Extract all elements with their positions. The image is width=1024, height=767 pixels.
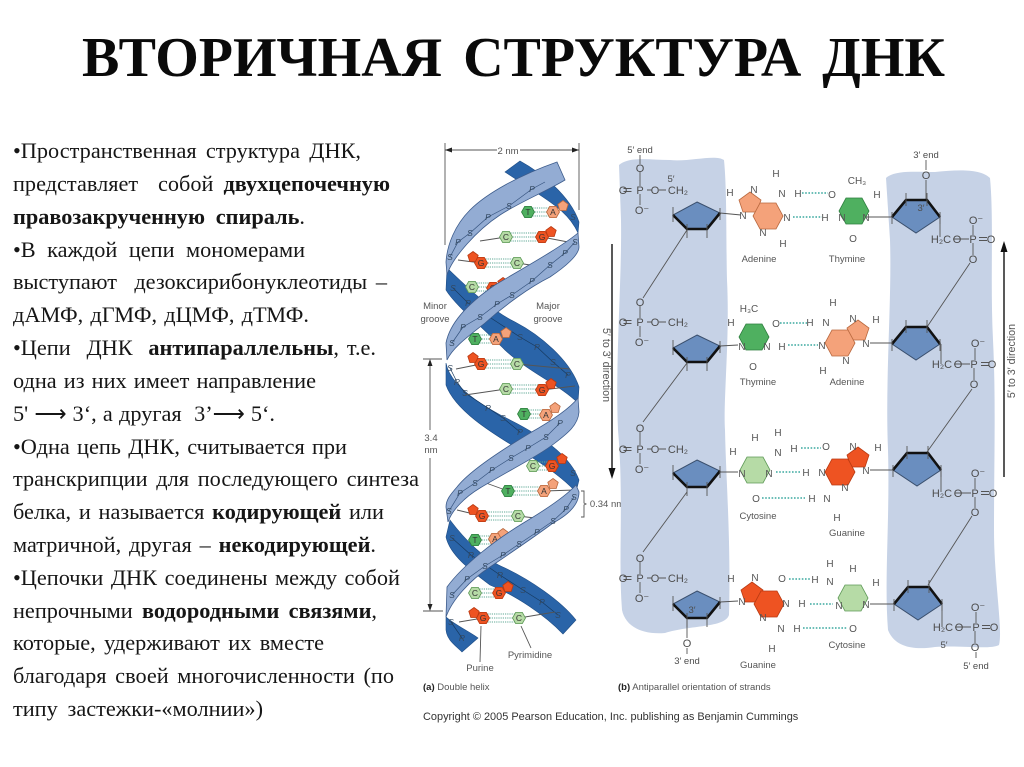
chemical labels: bases: H xyxy=(873,190,881,201)
chemical labels: bases: H xyxy=(798,599,806,610)
dimension: 2 nm xyxy=(445,143,579,245)
base pairs: T xyxy=(525,207,531,217)
dark strand sugar-phosphate labels: S xyxy=(555,610,561,620)
light strand sugar-phosphate labels: P xyxy=(557,418,563,428)
text block: DNA secondary structure description: одна из них имеет направление xyxy=(13,368,316,393)
chemical labels: backbone: 3′ xyxy=(917,203,925,214)
base pairs: A xyxy=(541,486,547,496)
base pairs: G xyxy=(539,385,545,395)
chemical labels: backbone: CH₂ xyxy=(668,317,688,329)
chemical labels: bases: N xyxy=(759,613,767,624)
light strand sugar-phosphate labels: P xyxy=(457,488,463,498)
light strand sugar-phosphate labels: S xyxy=(571,492,577,502)
dimension: 0.34 nm xyxy=(581,491,624,517)
chemical labels: backbone: O xyxy=(619,444,628,456)
base pairs: A xyxy=(492,534,498,544)
chemical labels: backbone: O xyxy=(636,553,645,565)
light strand sugar-phosphate labels: P xyxy=(529,184,535,194)
chemical labels: bases: N xyxy=(826,577,834,588)
labels: purine and pyrimidine: Pyrimidine xyxy=(508,650,552,661)
dark strand sugar-phosphate labels: P xyxy=(465,298,471,308)
light strand sugar-phosphate labels: P xyxy=(489,465,495,475)
labels: purine and pyrimidine xyxy=(466,626,552,674)
base names: Thymine xyxy=(829,254,865,265)
text block: DNA secondary structure description: •Цепочки ДНК соединены между собой xyxy=(13,565,400,590)
light strand sugar-phosphate labels: P xyxy=(534,527,540,537)
chemical labels: backbone: CH₂ xyxy=(668,185,688,197)
chemical labels: bases: O xyxy=(772,319,780,330)
chemical labels: backbone: O xyxy=(683,638,692,650)
base names: Guanine xyxy=(740,660,776,671)
dark strand sugar-phosphate labels xyxy=(447,212,576,643)
dark strand sugar-phosphate labels: S xyxy=(448,617,454,627)
chemical labels: backbone: O xyxy=(955,622,964,634)
chemical labels: bases: N xyxy=(822,318,830,329)
chemical labels: bases: N xyxy=(841,483,849,494)
light strand sugar-phosphate labels: S xyxy=(543,432,549,442)
chemical labels: backbone: P xyxy=(970,359,978,371)
text block: DNA secondary structure description: благодаря своей многочисленности (по xyxy=(13,663,394,688)
chemical labels: backbone: O xyxy=(989,488,998,500)
base pairs: A xyxy=(550,207,556,217)
nitrogen bases xyxy=(739,192,869,617)
base pairs: T xyxy=(472,535,478,545)
chemical labels: bases: H xyxy=(802,468,810,479)
chemical labels: bases: H xyxy=(727,318,735,329)
chemical labels: bases: H xyxy=(829,298,837,309)
light strand sugar-phosphate labels: S xyxy=(508,453,514,463)
copyright: Copyright © 2005 Pearson Education, Inc. publishing as Benjamin Cummings xyxy=(423,711,799,723)
caption: double helix: (a) Double helix xyxy=(423,682,490,693)
chemical labels: backbone: O xyxy=(651,185,660,197)
light strand sugar-phosphate labels: P xyxy=(563,504,569,514)
groove labels: groove xyxy=(420,314,450,325)
chemical labels: bases: N xyxy=(823,494,831,505)
dimension: 3.4 nm: nm xyxy=(424,445,438,456)
chemical labels: backbone: O⁻ xyxy=(635,337,649,349)
chemical labels: bases: N xyxy=(739,211,747,222)
base pairs: T xyxy=(521,409,527,419)
chemical labels: bases: H xyxy=(874,443,882,454)
chemical labels: bases: N xyxy=(835,601,843,612)
chemical labels: bases: H xyxy=(808,494,816,505)
chemical labels: backbone: O xyxy=(651,573,660,585)
text block: DNA secondary structure description: транскрипции для последующего синтеза xyxy=(13,466,419,491)
dark strand sugar-phosphate labels: R xyxy=(459,633,465,643)
chemical labels: backbone: O xyxy=(651,444,660,456)
chemical labels: bases: H xyxy=(833,513,841,524)
dark strand sugar-phosphate labels: R xyxy=(468,550,474,560)
chemical labels: bases: N xyxy=(849,314,857,325)
text block: DNA secondary structure description: 5' ⟶ 3‘, а другая 3’⟶ 5‘. xyxy=(13,401,275,426)
base pairs: G xyxy=(549,461,555,471)
chemical labels: backbone: O xyxy=(969,254,978,266)
chemical labels: bases: O xyxy=(778,574,786,585)
light strand sugar-phosphate labels: S xyxy=(506,201,512,211)
light strand sugar-phosphate labels: P xyxy=(525,443,531,453)
chemical labels: bases: CH₃ xyxy=(848,176,866,187)
chemical labels: bases: O xyxy=(849,624,857,635)
base pairs: G xyxy=(539,232,545,242)
base names: Cytosine xyxy=(829,640,865,651)
chemical labels: backbone: 5′ xyxy=(667,174,675,185)
base pairs: C xyxy=(514,359,520,369)
chemical labels: backbone: O⁻ xyxy=(635,593,649,605)
base pairs: T xyxy=(472,334,478,344)
text block: DNA secondary structure description: типу застежки-«молнии») xyxy=(13,696,263,721)
base pairs: G xyxy=(478,258,484,268)
chemical labels: bases: H xyxy=(772,169,780,180)
dimension: 0.34 nm: 0.34 nm xyxy=(590,499,624,510)
chemical labels: backbone: H₂C xyxy=(933,622,953,634)
light strand sugar-phosphate labels xyxy=(446,182,578,600)
base pairs: C xyxy=(472,588,478,598)
back dark ribbons xyxy=(446,161,579,652)
base names: Guanine xyxy=(829,528,865,539)
dark strand sugar-phosphate labels: S xyxy=(570,468,576,478)
chemical labels: bases: H xyxy=(849,564,857,575)
chemical labels: bases: H xyxy=(793,624,801,635)
chemical labels: bases: N xyxy=(838,213,846,224)
chemical labels: bases: N xyxy=(862,339,870,350)
chemical labels: backbone: 5′ xyxy=(940,640,948,651)
chemical labels: backbone: P xyxy=(636,573,644,585)
light strand sugar-phosphate labels: P xyxy=(464,574,470,584)
light strand sugar-phosphate labels: S xyxy=(446,506,452,516)
base pairs: C xyxy=(503,384,509,394)
light strand sugar-phosphate labels: P xyxy=(494,299,500,309)
light strand sugar-phosphate labels: S xyxy=(447,252,453,262)
chemical labels: backbone: O⁻ xyxy=(635,205,649,217)
text block: DNA secondary structure description: непрочными водородными связями, xyxy=(13,598,377,623)
chemical labels: bases: H₃C xyxy=(740,304,758,315)
chemical labels: bases: N xyxy=(862,466,870,477)
chemical labels: bases: N xyxy=(862,213,870,224)
dark strand sugar-phosphate labels: P xyxy=(534,342,540,352)
chemical labels: bases: H xyxy=(726,188,734,199)
chemical labels: bases: N xyxy=(763,342,771,353)
text block: DNA secondary structure description: матричной, другая – некодирующей. xyxy=(13,532,376,557)
light strand sugar-phosphate labels: P xyxy=(562,248,568,258)
arrow: left 5' to 3' direction xyxy=(600,244,616,479)
light strand sugar-phosphate labels: S xyxy=(516,539,522,549)
base pair connectors xyxy=(456,208,575,622)
chemical labels: bases: H xyxy=(768,644,776,655)
text block: DNA secondary structure description: представляет собой двухцепочечную xyxy=(13,171,390,196)
chemical labels: bases: N xyxy=(774,448,782,459)
dark strand sugar-phosphate labels: S xyxy=(550,357,556,367)
chemical labels: backbone: O xyxy=(954,359,963,371)
base pairs: G xyxy=(496,588,502,598)
dimension: 3.4 nm xyxy=(423,359,443,611)
chemical labels: backbone: O xyxy=(619,317,628,329)
chemical labels: bases: H xyxy=(872,315,880,326)
dark strand sugar-phosphate labels: S xyxy=(570,212,576,222)
chemical labels: backbone: 3′ end xyxy=(674,656,700,667)
chemical labels: backbone: 5′ end xyxy=(963,661,989,672)
light strand sugar-phosphate labels: P xyxy=(460,322,466,332)
chemical labels: bases: N xyxy=(842,356,850,367)
chemical labels: backbone: O xyxy=(619,573,628,585)
dark strand sugar-phosphate labels: P xyxy=(539,597,545,607)
light strand sugar-phosphate labels: S xyxy=(572,237,578,247)
chemical labels: backbone: P xyxy=(972,622,980,634)
chemical labels: bases: H xyxy=(790,444,798,455)
chemical labels: bases: H xyxy=(826,559,834,570)
light strand sugar-phosphate labels: S xyxy=(482,561,488,571)
base pairs: T xyxy=(505,486,511,496)
text block: DNA secondary structure description: дАМФ, дГМФ, дЦМФ, дТМФ. xyxy=(13,302,309,327)
chemical labels: backbone: O⁻ xyxy=(971,338,985,350)
chemical labels: backbone: P xyxy=(636,317,644,329)
chemical labels: backbone: O xyxy=(953,234,962,246)
chemical labels: backbone: H₂C xyxy=(931,234,951,246)
dark strand sugar-phosphate labels: P xyxy=(517,427,523,437)
base pairs: C xyxy=(530,461,536,471)
chemical labels: bases: H xyxy=(811,575,819,586)
chemical labels: backbone: O xyxy=(987,234,996,246)
dark strand sugar-phosphate labels: S xyxy=(500,413,506,423)
chemical labels: bases: H xyxy=(872,578,880,589)
base names xyxy=(740,254,865,671)
chemical labels: backbone: P xyxy=(636,444,644,456)
text block: DNA secondary structure description: белка, и называется кодирующей или xyxy=(13,499,384,524)
sugars xyxy=(673,193,942,627)
chemical labels: backbone: H₂C xyxy=(932,488,952,500)
chemical labels: bases: H xyxy=(774,428,782,439)
text block: DNA secondary structure description: которые, удерживают их вместе xyxy=(13,630,324,655)
chemical labels: backbone: O⁻ xyxy=(971,602,985,614)
chemical labels: bases: N xyxy=(738,597,746,608)
groove labels: Major xyxy=(536,301,560,312)
groove labels xyxy=(420,301,563,325)
chemical labels: backbone: O⁻ xyxy=(971,468,985,480)
chemical labels: bases: O xyxy=(822,442,830,453)
chemical labels: bases: O xyxy=(749,362,757,373)
dark strand sugar-phosphate labels: S xyxy=(449,533,455,543)
dimension: 2 nm: 2 nm xyxy=(497,146,519,157)
chemical labels: bases: N xyxy=(778,189,786,200)
dark strand sugar-phosphate labels: S xyxy=(520,585,526,595)
chemical labels: backbone xyxy=(619,145,999,672)
dark strand sugar-phosphate labels: S xyxy=(447,363,453,373)
base pairs: G xyxy=(480,613,486,623)
text block: DNA secondary structure description: правозакрученную спираль. xyxy=(13,204,305,229)
chemical labels: bases: N xyxy=(818,341,826,352)
text block: DNA secondary structure description: •Одна цепь ДНК, считывается при xyxy=(13,434,347,458)
chemical labels: backbone: O xyxy=(651,317,660,329)
light strand sugar-phosphate labels: S xyxy=(547,260,553,270)
chemical labels: backbone: O⁻ xyxy=(969,215,983,227)
chemical labels: backbone: O xyxy=(636,163,645,175)
chemical labels: backbone: O xyxy=(954,488,963,500)
title: ВТОРИЧНАЯ СТРУКТУРА ДНК xyxy=(82,27,945,89)
chemical labels: bases: O xyxy=(849,234,857,245)
chemical labels: bases: H xyxy=(779,239,787,250)
base names: Cytosine xyxy=(740,511,776,522)
text block: DNA secondary structure description xyxy=(13,138,419,721)
chemical labels: backbone: O xyxy=(619,185,628,197)
chemical labels: backbone: CH₂ xyxy=(668,444,688,456)
dimension: 3.4 nm: 3.4 xyxy=(424,433,438,444)
base pairs: C xyxy=(515,511,521,521)
chemical labels: backbone: CH₂ xyxy=(668,573,688,585)
chemical labels: backbone: O xyxy=(990,622,999,634)
dark strand sugar-phosphate labels: S xyxy=(462,388,468,398)
chemical labels: bases: H xyxy=(751,433,759,444)
base pairs: A xyxy=(543,410,549,420)
base pairs: C xyxy=(516,613,522,623)
light strand sugar-phosphate labels: P xyxy=(500,550,506,560)
dark strand sugar-phosphate labels: S xyxy=(517,332,523,342)
arrow: left 5' to 3' direction: 5′ to 3′ direction xyxy=(600,328,612,402)
arrow: right 5' to 3' direction: 5′ to 3′ direction xyxy=(1006,324,1018,398)
chemical labels: backbone: P xyxy=(636,185,644,197)
dark strand sugar-phosphate labels: R xyxy=(497,570,503,580)
labels: purine and pyrimidine: Purine xyxy=(466,663,494,674)
text block: DNA secondary structure description: •Цепи ДНК антипараллельны, т.е. xyxy=(13,335,376,360)
chemical labels: backbone: P xyxy=(971,488,979,500)
caption: antiparallel orientation: (b) Antiparallel orientation of strands xyxy=(618,682,771,693)
chemical labels: bases: O xyxy=(828,190,836,201)
chemical labels: backbone: O xyxy=(971,507,980,519)
base pairs xyxy=(466,200,568,624)
base pairs: C xyxy=(514,258,520,268)
text block: DNA secondary structure description: •Пространственная структура ДНК, xyxy=(13,138,361,163)
light strand sugar-phosphate labels: S xyxy=(449,338,455,348)
base names: Adenine xyxy=(742,254,776,265)
light strand sugar-phosphate labels: S xyxy=(550,516,556,526)
backbone bonds xyxy=(624,155,990,658)
base names: Adenine xyxy=(830,377,864,388)
light strand sugar-phosphate labels: P xyxy=(529,276,535,286)
light strand sugar-phosphate labels: S xyxy=(509,290,515,300)
chemical labels: backbone: O⁻ xyxy=(635,464,649,476)
chemical labels: backbone: O xyxy=(988,359,997,371)
chemical labels: backbone: 5′ end xyxy=(627,145,653,156)
chemical labels: bases: H xyxy=(806,318,814,329)
chemical labels: backbone: O xyxy=(922,170,931,182)
base pairs: G xyxy=(479,511,485,521)
chemical labels: bases: N xyxy=(765,469,773,480)
base pairs: G xyxy=(478,359,484,369)
chemical labels: backbone: P xyxy=(969,234,977,246)
chemical labels: bases: H xyxy=(819,366,827,377)
chemical labels: bases: H xyxy=(729,447,737,458)
dark strand sugar-phosphate labels: R xyxy=(454,377,460,387)
dark strand sugar-phosphate labels: S xyxy=(450,283,456,293)
chemical labels: bases: N xyxy=(750,185,758,196)
chemical labels: bases: H xyxy=(794,189,802,200)
chemical labels: bases: N xyxy=(818,468,826,479)
light strand sugar-phosphate labels: S xyxy=(449,590,455,600)
panel: antiparallel strands xyxy=(600,145,1018,693)
light strand sugar-phosphate labels: S xyxy=(467,228,473,238)
chemical labels: bases: H xyxy=(778,342,786,353)
arrow: right 5' to 3' direction xyxy=(1000,241,1018,477)
base names: Thymine xyxy=(740,377,776,388)
light strand sugar-phosphate labels: P xyxy=(485,212,491,222)
base pairs: C xyxy=(469,282,475,292)
chemical labels: bases: N xyxy=(738,469,746,480)
chemical labels: bases xyxy=(726,169,882,655)
base pairs: C xyxy=(503,232,509,242)
chemical labels: bases: N xyxy=(862,600,870,611)
chemical labels: bases: O xyxy=(752,494,760,505)
chemical labels: bases: N xyxy=(777,624,785,635)
chemical labels: bases: N xyxy=(759,228,767,239)
backbone background strips xyxy=(617,158,1000,648)
light strand sugar-phosphate labels: S xyxy=(472,478,478,488)
chemical labels: bases: N xyxy=(738,342,746,353)
chemical labels: backbone: 3′ end xyxy=(913,150,939,161)
chemical labels: bases: H xyxy=(821,213,829,224)
panel: double helix xyxy=(420,143,624,693)
chemical labels: backbone: H₂C xyxy=(932,359,952,371)
chemical labels: bases: N xyxy=(783,213,791,224)
chemical labels: backbone: 3′ xyxy=(688,605,696,616)
light strand sugar-phosphate labels: S xyxy=(477,312,483,322)
light strand sugar-phosphate labels: P xyxy=(455,237,461,247)
front light ribbons xyxy=(446,162,579,617)
chemical labels: backbone: O xyxy=(971,642,980,654)
chemical labels: bases: N xyxy=(751,573,759,584)
chemical labels: backbone: O xyxy=(636,423,645,435)
chemical labels: bases: H xyxy=(727,574,735,585)
text block: DNA secondary structure description: •В каждой цепи мономерами xyxy=(13,236,305,262)
chemical labels: bases: N xyxy=(782,599,790,610)
base pairs: A xyxy=(493,334,499,344)
dark strand sugar-phosphate labels: P xyxy=(565,370,571,380)
hydrogen bonds xyxy=(762,193,847,628)
dark strand sugar-phosphate labels: P xyxy=(485,403,491,413)
chemical labels: backbone: O xyxy=(636,297,645,309)
groove labels: Minor xyxy=(423,301,447,312)
groove labels: groove xyxy=(533,314,563,325)
chemical labels: bases: N xyxy=(849,442,857,453)
base pairs: G xyxy=(490,283,496,293)
text block: DNA secondary structure description: выступают дезоксирибонуклеотиды – xyxy=(13,269,387,294)
chemical labels: backbone: O xyxy=(970,379,979,391)
